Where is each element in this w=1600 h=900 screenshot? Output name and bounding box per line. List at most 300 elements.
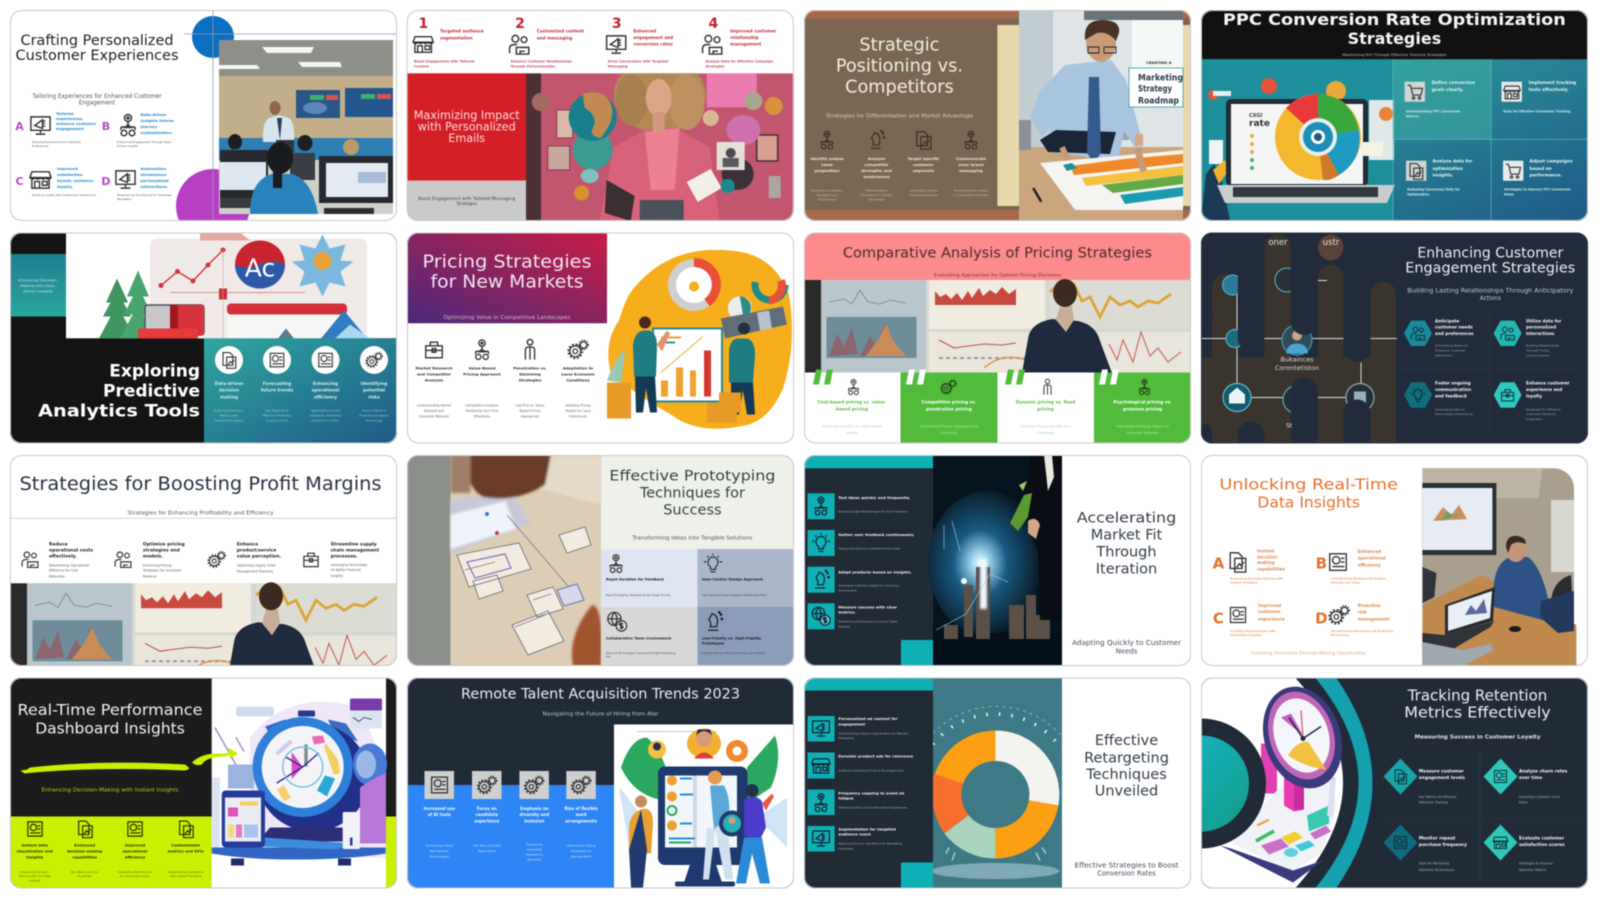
four strategy columns: Analyze xyxy=(868,156,885,161)
step list: Embracing Agile Methodologies for Quick Feedback xyxy=(838,510,908,514)
lime feature band: for Immediate Action xyxy=(120,874,150,878)
red title block: with Personalized xyxy=(418,121,516,134)
four strategy columns: Preferences xyxy=(569,414,587,418)
teal feature panel: risks xyxy=(368,394,380,400)
panel: effective prototyping techniques xyxy=(407,453,794,667)
teal feature panel: Future Trends in xyxy=(362,408,386,412)
four strategy columns: Analysis xyxy=(425,378,444,382)
teal subtitle box: Driven Insights xyxy=(23,288,53,294)
title: Crafting Personalized xyxy=(20,33,174,49)
four strategy columns: Effectively xyxy=(474,414,490,418)
tactic list: Campaigns xyxy=(838,846,854,850)
grid panels: Understanding PPC Conversion xyxy=(1406,110,1460,114)
panel: ppc conversion rate optimization xyxy=(1201,10,1588,221)
four strategy items: strategies and xyxy=(143,548,180,554)
lime feature band: Enhancing Decision- xyxy=(20,870,49,874)
decorative purple circle xyxy=(175,168,250,221)
four comparison columns: Challenges xyxy=(1036,431,1055,435)
four strategy columns: Demand and xyxy=(424,409,444,413)
panel: crafting personalized customer experiences xyxy=(10,10,397,243)
items A to D xyxy=(15,111,174,201)
strategy grid with hexagons: personalized xyxy=(1526,325,1556,330)
strategy grid with hexagons: Customer Feedback xyxy=(1526,412,1556,416)
items A to D: D xyxy=(101,175,111,188)
metrics grid with diamonds: Tools for Monitoring xyxy=(1418,862,1449,866)
title: Retargeting xyxy=(1084,750,1169,766)
tactic list: Dynamic product ads for relevance xyxy=(838,754,914,759)
items A to D: enhance customer xyxy=(56,121,96,126)
illustration: recruiter monitor and team xyxy=(614,724,794,888)
strategy grid with hexagons: Anticipate xyxy=(1435,318,1459,323)
step list: Improvement xyxy=(838,589,856,593)
photo: wireframe sketches xyxy=(450,453,602,666)
four strategy columns: Differentiation xyxy=(866,189,887,193)
subtitle: Effective Strategies to Boost xyxy=(1074,862,1179,870)
four trend columns: Talent Pools xyxy=(477,849,496,853)
four strategy columns: Selling Propositions xyxy=(909,193,938,197)
title: Dashboard Insights xyxy=(35,719,185,737)
items A to D: Transforming Business Strategies xyxy=(1331,576,1386,580)
title: Iteration xyxy=(1096,561,1157,577)
items A to D: B xyxy=(102,120,110,133)
panel: tracking retention metrics effectively xyxy=(1136,676,1588,888)
panel: accelerating market fit through iteration xyxy=(804,455,1191,666)
lime feature band: decision-making xyxy=(67,848,103,854)
panel: exploring predictive analytics tools xyxy=(10,232,397,444)
illustration: laptop with conversion pie xyxy=(1201,59,1395,221)
four strategy items: Strategies for Increased xyxy=(143,569,181,573)
four trend columns: experience xyxy=(474,818,500,824)
photo: man with marketing roadmap xyxy=(1019,10,1183,221)
teal feature panel: Predictive Analytics xyxy=(214,418,244,422)
items A to D: engagement. xyxy=(56,126,86,131)
four trend columns: work xyxy=(576,812,587,817)
tactic list: Understanding Audience Segmentation for Effective xyxy=(838,731,909,735)
numbered items: 1 xyxy=(419,16,428,32)
numbered items: Analyze Data for Effective Campaign xyxy=(705,59,774,63)
four strategy items: Enhancing Pricing xyxy=(143,564,171,568)
red title block: Emails xyxy=(448,132,485,145)
items A to D: Preferences xyxy=(32,144,49,148)
panel: strategies for boosting profit margins xyxy=(10,455,397,676)
four trend columns: arrangements xyxy=(565,818,598,824)
four strategy items: Enhance xyxy=(237,542,258,548)
lime feature band: Insights xyxy=(29,878,41,882)
grid panels: optimization xyxy=(1432,166,1463,172)
title: Metrics Effectively xyxy=(1404,704,1551,722)
four strategy columns: Weaknesses xyxy=(818,198,837,202)
teal feature panel: future trends xyxy=(261,388,294,394)
title: Through xyxy=(1095,545,1157,561)
title: Strategies xyxy=(1348,29,1441,48)
panel: remote talent acquisition trends 2023 xyxy=(407,678,794,889)
step list: Leveraging Customer Insights for Continuous xyxy=(838,584,900,588)
strategy grid with hexagons: and preferences xyxy=(1435,331,1474,336)
four comparison columns: Competitive pricing vs. xyxy=(922,400,977,404)
items A to D: efficiency xyxy=(1358,562,1381,568)
strategy grid with hexagons: Personalized Interactions xyxy=(1435,412,1473,416)
title: Engagement Strategies xyxy=(1405,260,1575,276)
four strategy items: chain management xyxy=(331,548,380,554)
four comparison columns: Consumer Behavior xyxy=(1126,431,1159,435)
four strategy columns: weaknesses xyxy=(863,174,890,179)
strategy grid with hexagons: Building Relationships xyxy=(1526,344,1560,348)
four strategy columns: Communicate xyxy=(956,156,986,161)
four technique cells: User-Centered Design: Engaging Stakeholders Early xyxy=(702,593,767,597)
tactic list: Utilizing Dynamic Ads for Personalized Experiences xyxy=(838,806,908,810)
teal feature panel: Enhancing xyxy=(313,381,338,387)
numbered items: through Personalization xyxy=(511,64,556,68)
step list: Adapt products based on insights. xyxy=(838,569,912,574)
panel: comparative analysis of pricing strategies xyxy=(804,232,1191,444)
four strategy columns: customer xyxy=(913,162,934,167)
panel: effective retargeting techniques unveiled xyxy=(804,678,1191,888)
grid panels xyxy=(1393,59,1588,221)
teal feature panel: Predictive Analytics xyxy=(359,414,389,418)
strategy grid with hexagons: Communication xyxy=(1526,354,1550,358)
title: Remote Talent Acquisition Trends 2023 xyxy=(461,686,740,702)
items A to D: Enhanced xyxy=(1358,549,1381,555)
four trend columns: candidate xyxy=(476,812,498,817)
lime feature band: Enhanced xyxy=(74,842,95,848)
four comparison columns: Psychological pricing vs. xyxy=(1113,400,1172,404)
subtitle: Conversion Rates xyxy=(1097,870,1156,878)
four strategy columns: Value-Based xyxy=(468,366,496,370)
roadmap sign: Strategy xyxy=(1138,85,1172,95)
strategy grid with hexagons: Anticipating Needs for xyxy=(1435,344,1469,348)
four trend columns: Candidate xyxy=(527,848,542,852)
step list: Testing Assumptions to Validate Product Ideas xyxy=(837,546,901,550)
teal feature panel: Technology xyxy=(365,418,383,422)
tactic list: engagement xyxy=(838,721,865,726)
items A to D: C xyxy=(1213,609,1224,627)
four strategy items: processes. xyxy=(331,553,358,559)
subtitle: Needs xyxy=(1116,647,1138,655)
four technique cells: Collaborative Team Involvement xyxy=(606,636,672,640)
subtitle: Strategies for Enhancing Profitability and Efficiency xyxy=(128,511,274,517)
teal feature panel: Analytics in Action xyxy=(312,418,339,422)
four comparison columns: Pricing xyxy=(846,431,858,435)
photo: customer network diagram through rounded bars: oner xyxy=(1268,238,1288,248)
four strategy columns: Adapting Pricing xyxy=(565,404,591,408)
snowflake xyxy=(292,234,354,296)
step list: Measure success with clear xyxy=(838,604,897,609)
four trend columns: Focus on xyxy=(477,806,497,811)
items A to D: satisfaction xyxy=(57,172,83,177)
items A to D: interactions. xyxy=(140,184,169,189)
teal feature panel: Forecasting xyxy=(263,381,291,387)
title: Predictive xyxy=(103,382,200,402)
four comparison columns: Competitive Pricing: Strategies and xyxy=(920,424,978,428)
lime feature band: visualization and xyxy=(16,848,53,854)
four strategy columns: Understanding Market xyxy=(417,404,452,408)
four technique cells: Usability Testing: Refining Ideas Through Feedback xyxy=(702,651,766,655)
items A to D: Instant Analytics xyxy=(1230,580,1258,584)
illustration: analytics dashboard xyxy=(66,232,397,338)
four strategy columns: and Competitor xyxy=(417,372,451,376)
panel: unlocking real-time data insights xyxy=(1201,455,1588,666)
four strategy columns: Market Research xyxy=(416,366,453,370)
numbered items: 4 xyxy=(709,16,719,32)
four comparison columns: penetration pricing xyxy=(926,406,972,412)
grid panels: Analyzing Conversion Data for xyxy=(1407,188,1460,192)
four trend columns: Rise of flexible xyxy=(564,806,598,811)
four strategy items: effectively. xyxy=(49,553,77,559)
four strategy columns: Penetration vs. xyxy=(513,366,547,370)
lime feature band: with Instant Feedback xyxy=(170,874,202,878)
four strategy columns: segments xyxy=(913,168,935,173)
step list: Gather user feedback continuously. xyxy=(838,532,915,537)
tactic list: Personalized ad content for xyxy=(838,716,898,721)
teal feature panel: Industries: Predictive xyxy=(310,414,341,418)
metrics grid with diamonds: Analyze churn rates xyxy=(1519,768,1568,774)
metrics grid with diamonds: Key Metrics for Effective xyxy=(1419,795,1457,799)
four strategy items: Reduce xyxy=(49,542,68,548)
title: Effective Prototyping xyxy=(609,469,775,485)
four trend columns: Data-Driven Hiring xyxy=(567,844,595,848)
tactic list: Segmentation for targeted xyxy=(838,826,896,832)
lime feature band: capabilities xyxy=(72,854,98,860)
lime feature band: Improved xyxy=(125,842,145,848)
items A to D: loyalty. xyxy=(57,184,74,189)
items A to D: Tailoring Experiences for Individual xyxy=(31,140,81,144)
Ac logo: Ac xyxy=(245,254,275,282)
numbered items: Drive Conversions with Targeted xyxy=(608,59,669,63)
four trend columns: of AI tools xyxy=(428,812,451,817)
lime feature band: insights xyxy=(26,854,44,860)
grid panels: Metrics xyxy=(1406,114,1419,118)
title: Enhancing Customer xyxy=(1417,245,1563,261)
strategy grid with hexagons: Enhance customer xyxy=(1526,380,1570,386)
illustration: stopwatch dashboard xyxy=(212,678,387,888)
strategy grid with hexagons: Satisfaction xyxy=(1435,354,1453,358)
title: Analytics Tools xyxy=(38,402,200,422)
metrics grid with diamonds: Retention Tracking xyxy=(1419,800,1448,804)
four trend columns: Emphasis on xyxy=(520,806,549,811)
tactic list: fatigue xyxy=(838,796,854,801)
four trend columns: Technologies xyxy=(429,854,449,858)
items A to D: Enhancing Engagement Through Data- xyxy=(117,140,171,144)
items A to D: boosts customer xyxy=(57,178,94,183)
four trend columns: Experience xyxy=(526,852,543,856)
title: Techniques xyxy=(1085,767,1167,783)
strategy grid with hexagons: Leveraging Data for xyxy=(1435,408,1466,412)
teal feature panel: making xyxy=(220,394,238,400)
items A to D: through Live Data xyxy=(1331,580,1360,584)
items A to D: Driven Insights xyxy=(117,144,139,148)
items A to D: Navigation xyxy=(117,197,132,201)
four strategy columns: messaging xyxy=(959,168,983,173)
roadmap sign xyxy=(1129,60,1183,107)
items A to D: Monitoring xyxy=(1331,633,1348,637)
photo: man facing charts xyxy=(804,279,1191,373)
four strategy columns: Leveraging Unique xyxy=(909,189,938,193)
four technique cells: User-Centric Design Approach xyxy=(702,578,763,582)
metrics grid with diamonds: engagement levels xyxy=(1419,775,1465,781)
tactic list: Retargeting xyxy=(838,736,854,740)
four strategy items: Leveraging Technology xyxy=(331,563,367,567)
four comparison columns: Dynamic Pricing: Benefits and xyxy=(1021,424,1070,428)
lime feature band: efficiency xyxy=(125,854,146,860)
gradient title block: Pricing Strategies xyxy=(422,252,592,272)
numbered items xyxy=(413,16,777,68)
teal feature panel: Analytics Tools xyxy=(266,418,288,422)
metrics grid with diamonds: Measure customer xyxy=(1419,768,1465,774)
items A to D: Streamlining Operations via Real-Time xyxy=(1331,629,1393,633)
four technique cells: Low-Fidelity vs. High-Fidelity xyxy=(702,636,762,640)
items A to D: capabilities xyxy=(1257,567,1285,573)
metrics grid with diamonds xyxy=(1384,750,1581,882)
numbered items: management xyxy=(730,41,761,46)
four strategy columns: Skimming xyxy=(519,372,541,376)
items A to D: Immediate Insights xyxy=(1230,633,1262,637)
four strategy columns: value xyxy=(821,162,833,167)
strategy grid with hexagons: loyalty xyxy=(1526,394,1542,398)
four comparison columns: Dynamic pricing vs. fixed xyxy=(1016,400,1075,404)
four trend columns: inclusion xyxy=(524,818,545,824)
subtitle: Building Lasting Relationships Through Anticipatory xyxy=(1407,288,1574,294)
four technique cells: Tool xyxy=(606,655,611,659)
four comparison columns: Outcomes xyxy=(941,431,958,435)
metrics grid with diamonds: over time xyxy=(1519,775,1542,781)
four trend columns: Recruitment xyxy=(430,849,449,853)
lime feature band: Visualizing Performance xyxy=(118,870,153,874)
gradient title block xyxy=(407,232,607,323)
numbered items: conversion rates xyxy=(633,41,673,46)
four strategy columns: Competitive Analysis: xyxy=(465,404,499,408)
items A to D xyxy=(1213,548,1393,637)
four technique cells: Prototypes xyxy=(702,641,724,645)
four strategy columns: Target specific xyxy=(907,156,940,161)
items A to D: Enhancing Decision-Making with xyxy=(1230,576,1283,580)
roadmap sign: CREATING A xyxy=(1146,60,1172,65)
panel: strategic positioning vs competitors xyxy=(804,10,1192,221)
strategy grid with hexagons: and feedback xyxy=(1435,394,1467,398)
items A to D: customization. xyxy=(140,130,173,135)
grid panels: goals clearly. xyxy=(1432,87,1464,93)
photo: man facing charts xyxy=(10,582,397,676)
four strategy columns: Consumer Behavior xyxy=(419,414,450,418)
four technique cells: Tools and Technologies: Choosing the Right Prototyping xyxy=(606,651,676,655)
items A to D: A xyxy=(1213,554,1225,572)
strategy grid with hexagons: Strategies for Effective xyxy=(1526,408,1561,412)
tactic list: Measuring Success: Key Metrics for Retargeting xyxy=(838,842,903,846)
four strategy columns: Strategies xyxy=(519,378,542,382)
items A to D: C xyxy=(15,175,24,188)
four trend columns: Remotely xyxy=(527,858,542,862)
grid panels: based on xyxy=(1530,166,1552,172)
four strategy columns xyxy=(810,131,989,202)
grid panels: tools effectively. xyxy=(1529,87,1569,93)
four comparison columns: pricing xyxy=(1037,406,1054,412)
items A to D: Proactive xyxy=(1358,603,1381,609)
subtitle: Actions xyxy=(1480,296,1501,302)
tactic list: Frequency capping to avoid ad xyxy=(838,790,904,795)
teal feature panel: Making with xyxy=(220,414,238,418)
four comparison columns: based pricing xyxy=(836,406,868,412)
metrics grid with diamonds: Retention Metrics xyxy=(1519,868,1547,872)
four strategy columns: Strengths and xyxy=(816,193,838,197)
items A to D: decision- xyxy=(1257,554,1279,560)
title: Strategies for Boosting Profit Margins xyxy=(20,474,382,495)
four strategy columns: Local Economic xyxy=(561,372,595,376)
grid panels: Adjust campaigns xyxy=(1530,159,1573,165)
four strategy items: Optimizing Supply Chain xyxy=(237,564,276,568)
items A to D: insights inform xyxy=(140,118,174,123)
teal feature panel: operational xyxy=(312,388,340,394)
teal feature panel: Enhancing Decision- xyxy=(214,408,244,412)
four strategy columns: Conditions xyxy=(566,378,590,382)
photo: customer network diagram through rounded bars: St xyxy=(1286,422,1293,430)
teal feature panel: potential xyxy=(363,388,385,394)
four strategy items: value perception. xyxy=(237,553,281,559)
four strategy items: Insights xyxy=(331,574,343,578)
teal subtitle box xyxy=(10,254,66,316)
teal feature panel: Effective Predictive xyxy=(263,414,292,418)
items A to D: risk xyxy=(1358,610,1367,616)
items A to D: Improved xyxy=(1258,603,1281,609)
title: Positioning vs. xyxy=(836,57,963,77)
four technique cells: Rapid Prototyping: Speeding Up the Design Process xyxy=(606,593,671,597)
grid panels: Implement tracking xyxy=(1529,80,1576,86)
closing line: Unlocking Immediate Decision-Making Opportunities xyxy=(1251,650,1367,656)
items A to D: journey xyxy=(140,124,158,129)
photo: customer network diagram through rounded bars xyxy=(1201,232,1397,444)
photo: customer network diagram through rounded bars: Corontetiston xyxy=(1275,364,1319,372)
strategy grid with hexagons: Through Timely xyxy=(1525,348,1550,352)
four strategy columns: Pricing Approach xyxy=(463,372,501,376)
numbered items: Customized content xyxy=(537,29,584,34)
four strategy columns: Analyzing Competitor xyxy=(811,189,844,193)
grey subtitle block xyxy=(407,181,526,222)
metrics grid with diamonds: Evaluate customer xyxy=(1519,836,1565,842)
subtitle: Maximizing ROI Through Effective Tracking Strategies xyxy=(1342,52,1447,57)
metrics grid with diamonds: Strategies to Improve xyxy=(1519,862,1553,866)
title: Customer Experiences xyxy=(16,48,178,64)
tactic list xyxy=(808,716,914,852)
teal subtitle box: Making with Data- xyxy=(20,283,56,288)
four strategy columns: strengths and xyxy=(861,168,892,173)
four strategy items: for Better Financial xyxy=(331,568,361,572)
numbered items: Strategies xyxy=(705,64,725,68)
pink header: Evaluating Approaches for Optimal Pricing Decisions xyxy=(934,272,1062,278)
lime feature band: Fingertips xyxy=(78,874,92,878)
photo: meeting room xyxy=(1422,468,1576,666)
strategy grid with hexagons: customer needs xyxy=(1435,325,1473,330)
numbered items: 2 xyxy=(515,16,525,32)
decorative blue circle xyxy=(192,16,234,58)
numbered items: segmentation xyxy=(440,35,473,40)
four strategy items: Optimize pricing xyxy=(143,542,185,548)
red title block: Maximizing Impact xyxy=(414,109,520,122)
roadmap sign: Roadmap xyxy=(1138,96,1179,106)
items A to D: Streamlining Touchpoints for Seamless xyxy=(117,193,172,197)
items A to D: streamlines xyxy=(140,172,167,177)
photo: training room xyxy=(219,40,393,214)
illustration: laptop with conversion pie: rate xyxy=(1249,119,1270,129)
roadmap sign: Marketing xyxy=(1138,74,1183,84)
lime feature band xyxy=(16,821,204,882)
items A to D: operational xyxy=(1358,556,1386,562)
metrics grid with diamonds: Monitor repeat xyxy=(1419,836,1455,842)
metrics grid with diamonds: Analyzing Customer Churn xyxy=(1519,795,1560,799)
grid panels: Strategies to Improve PPC Conversion xyxy=(1504,188,1571,192)
lime feature band: Key Metrics at Your xyxy=(71,870,99,874)
step list: Test ideas quickly and frequently. xyxy=(838,495,911,500)
subtitle: Tailoring Experiences for Enhanced Customer xyxy=(31,94,162,100)
items A to D: customer xyxy=(1258,609,1282,615)
strategy grid with hexagons: experience and xyxy=(1526,387,1562,392)
